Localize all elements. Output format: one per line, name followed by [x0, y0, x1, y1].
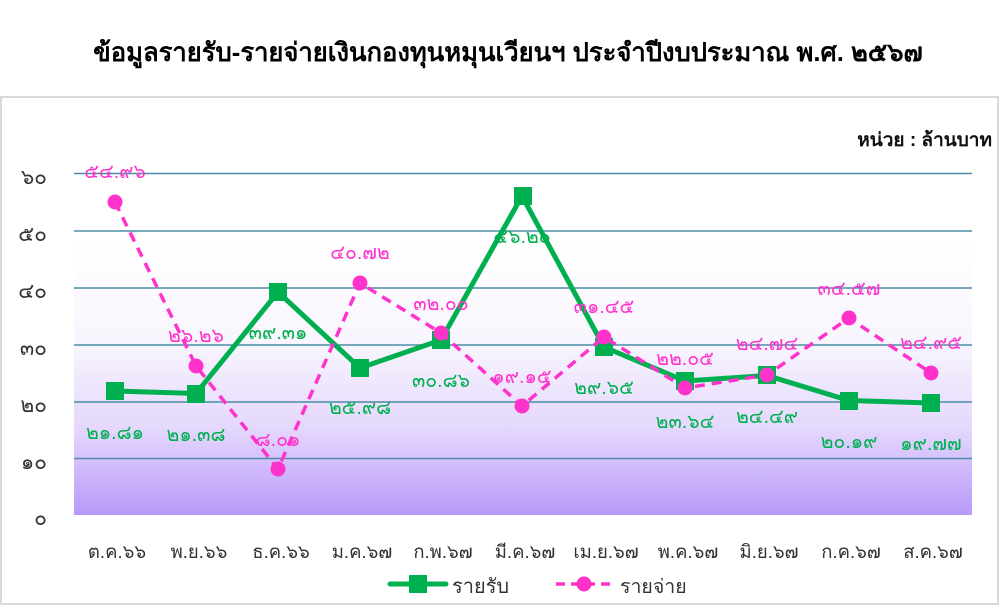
- line series: income: [106, 187, 940, 412]
- x axis labels: ก.ค.๖๗: [821, 541, 881, 562]
- income data labels: ๒๑.๘๑: [86, 422, 144, 444]
- income data labels: [86, 226, 962, 455]
- expense data labels: ๔๐.๗๒: [330, 242, 390, 264]
- expense data labels: ๕๔.๙๖: [84, 161, 146, 183]
- y axis labels: ๒๐: [20, 394, 47, 417]
- unit label: หน่วย : ล้านบาท: [857, 129, 992, 151]
- expense data labels: ๓๔.๕๗: [818, 278, 880, 300]
- x axis labels: ม.ค.๖๗: [332, 541, 392, 562]
- y axis labels: ๕๐: [18, 223, 47, 246]
- title: ข้อมูลรายรับ-รายจ่ายเงินกองทุนหมุนเวียนฯ ประจำปีงบประมาณ พ.ศ. ๒๕๖๗: [93, 38, 923, 69]
- income data labels: ๑๙.๗๗: [900, 433, 962, 455]
- expense data labels: ๓๒.๐๐: [413, 293, 469, 315]
- expense data labels: [84, 161, 962, 451]
- expense data labels: ๑๙.๑๕: [492, 366, 552, 388]
- x axis labels: ส.ค.๖๗: [903, 541, 963, 562]
- plot area background: [74, 173, 972, 515]
- expense data labels: ๓๑.๔๕: [574, 296, 634, 318]
- income data labels: ๒๑.๓๘: [166, 424, 226, 446]
- x axis labels: มิ.ย.๖๗: [740, 541, 798, 562]
- line series: expenses: [108, 194, 938, 476]
- x axis labels: ธ.ค.๖๖: [252, 541, 310, 562]
- y axis labels: ๔๐: [18, 280, 47, 303]
- y axis labels: [18, 166, 47, 530]
- legend: income: [390, 575, 509, 598]
- income data labels: ๒๙.๖๕: [574, 377, 634, 399]
- x axis labels: ก.พ.๖๗: [413, 541, 473, 562]
- income data labels: ๓๐.๘๖: [412, 370, 470, 392]
- legend: expenses: [556, 576, 687, 598]
- income data labels: ๒๐.๑๙: [821, 431, 877, 453]
- expense data labels: ๒๔.๗๔: [736, 333, 798, 355]
- income data labels: ๓๙.๓๑: [249, 322, 307, 344]
- y axis labels: ๑๐: [21, 451, 47, 474]
- income data labels: ๕๖.๒๐: [493, 226, 551, 248]
- x axis labels: พ.ค.๖๗: [658, 541, 718, 562]
- x axis labels: มี.ค.๖๗: [495, 541, 555, 562]
- income data labels: ๒๕.๙๘: [329, 397, 391, 419]
- expense data labels: ๘.๐๑: [256, 429, 300, 451]
- x axis labels: [88, 541, 963, 562]
- expense data labels: ๒๖.๒๖: [168, 325, 224, 347]
- x axis labels: เม.ย.๖๗: [573, 541, 639, 562]
- income data labels: ๒๓.๖๔: [656, 411, 714, 433]
- x axis labels: พ.ย.๖๖: [171, 541, 227, 562]
- expense data labels: ๒๒.๐๕: [656, 348, 714, 370]
- legend: income: รายรับ: [452, 576, 509, 598]
- legend: expenses: รายจ่าย: [620, 576, 687, 598]
- y axis labels: ๓๐: [20, 337, 47, 360]
- y axis labels: ๖๐: [21, 166, 47, 189]
- income data labels: ๒๔.๔๙: [736, 406, 798, 428]
- y axis labels: ๐: [34, 507, 47, 530]
- expense data labels: ๒๔.๙๕: [900, 332, 962, 354]
- x axis labels: ต.ค.๖๖: [88, 541, 146, 562]
